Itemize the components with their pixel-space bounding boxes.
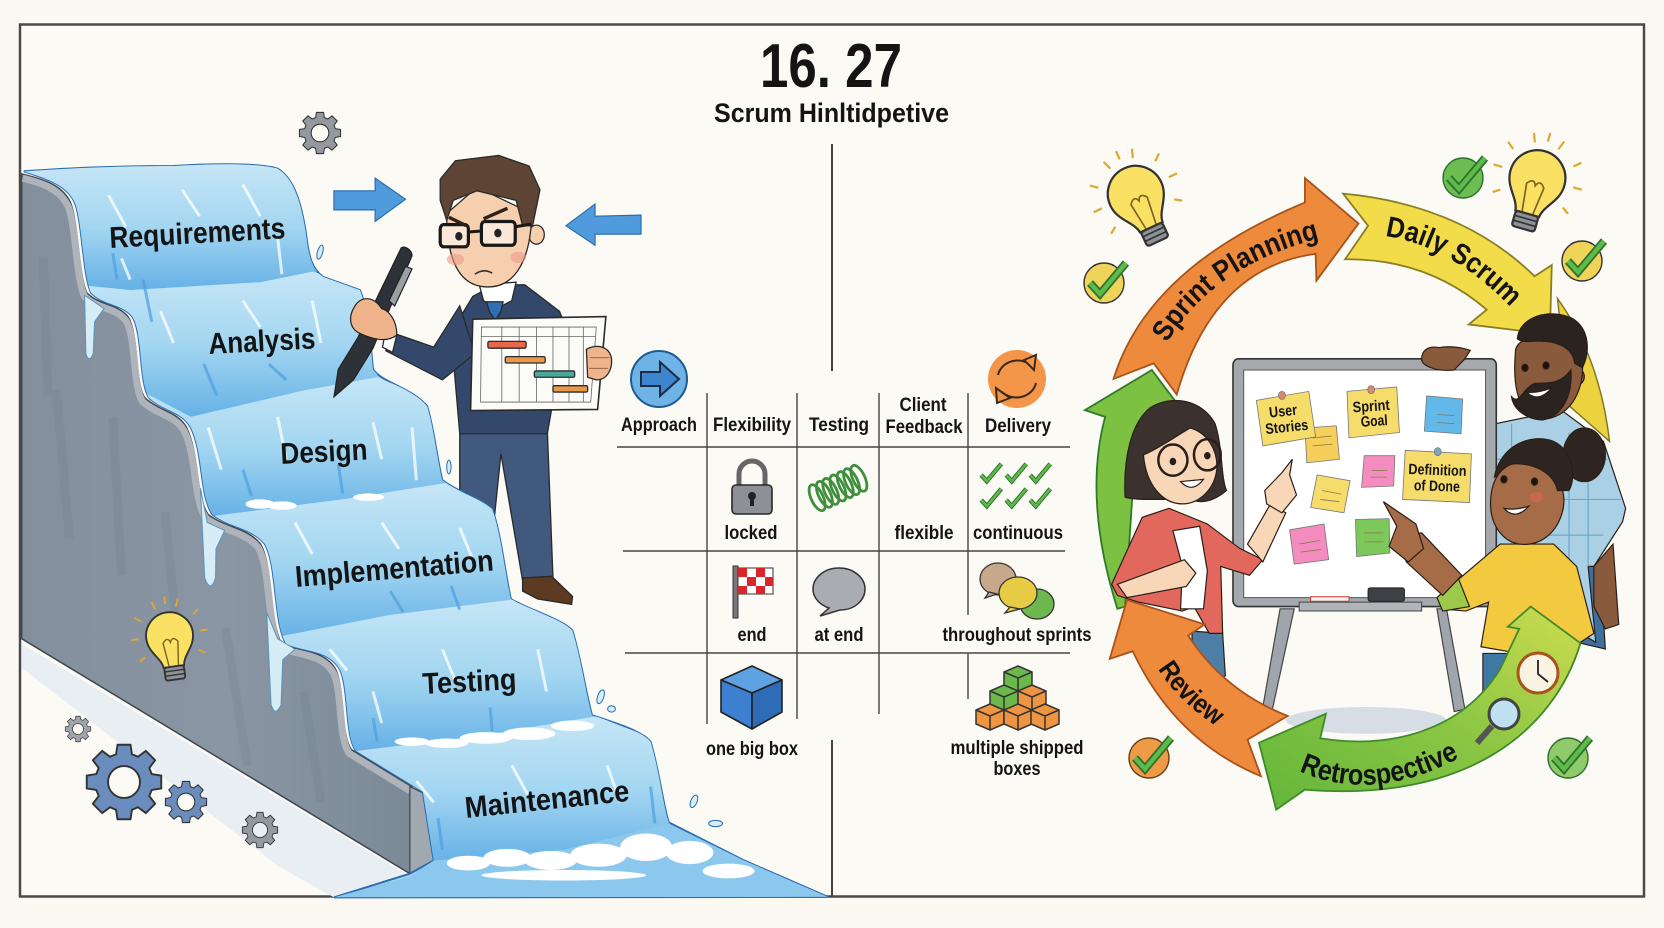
cycle path: Sprint Planning	[1167, 236, 1330, 343]
badge: check yellow right	[1562, 241, 1604, 281]
foam	[245, 493, 755, 881]
note text: Sprint Goal	[1352, 397, 1391, 431]
cell labels: boxes	[994, 758, 1041, 780]
title block	[714, 32, 949, 128]
column headers: Feedback	[886, 416, 963, 438]
cycle text: Daily Scrum: Daily Scrum	[1386, 216, 1519, 306]
subtitle: Scrum Hinltidpetive	[714, 98, 949, 128]
waterfall label: Design: Design	[280, 433, 368, 471]
stair wall	[22, 174, 434, 874]
waterfall label: Requirements: Requirements	[109, 212, 286, 255]
cell labels: end	[738, 624, 766, 646]
icon: gray speech bubble	[813, 568, 865, 616]
center divider	[831, 144, 833, 897]
icon: big blue gear	[87, 745, 161, 819]
cycle text: Sprint Planning: Sprint Planning	[1152, 224, 1318, 340]
column headers: Approach	[621, 414, 697, 436]
icon: clock	[1518, 653, 1558, 693]
title: 16. 27	[760, 32, 902, 101]
icon: medium blue gear	[165, 781, 207, 823]
cycle path: Retrospective	[1299, 746, 1480, 785]
note text: User Stories	[1263, 401, 1309, 438]
cycle text: Review: Review	[1158, 660, 1224, 724]
arrow: retrospective	[1259, 607, 1580, 810]
panel: scrum cycle	[1082, 132, 1626, 812]
icon: spring	[806, 463, 870, 513]
badge: check orange	[1129, 738, 1171, 778]
arrow: sprint planning	[1114, 178, 1359, 395]
waterfall label: Testing: Testing	[422, 663, 517, 701]
cell labels: continuous	[973, 522, 1063, 544]
water steps	[17, 163, 828, 897]
note text: Definition of Done: of Done	[1414, 477, 1460, 496]
icon: approach arrow	[631, 351, 687, 407]
column headers: Flexibility	[713, 414, 791, 436]
badge: check yellow left	[1084, 263, 1126, 303]
cell labels: multiple shipped	[950, 737, 1084, 759]
whiteboard	[1233, 359, 1496, 734]
panel: waterfall	[17, 112, 828, 897]
icon: small gear	[65, 716, 91, 742]
drips	[85, 295, 295, 711]
waterfall label: Maintenance: Maintenance	[463, 775, 631, 825]
splash droplets	[316, 244, 723, 827]
panel: comparison table	[617, 350, 1092, 780]
water streaks	[108, 184, 620, 802]
icon: bulb left	[1074, 132, 1200, 261]
icon: bulb on wall	[126, 591, 214, 685]
hand on board	[1422, 347, 1470, 370]
note text: Definition of Done	[1408, 461, 1467, 496]
cell labels: one big box	[706, 738, 798, 760]
arrow: review	[1110, 600, 1288, 776]
arrow: daily scrum	[1343, 194, 1552, 334]
column headers: Delivery	[985, 415, 1051, 437]
woman presenter	[1112, 401, 1297, 685]
column headers: Testing	[809, 414, 869, 436]
pen and hand	[334, 247, 412, 397]
cell labels: locked	[724, 522, 778, 544]
note text: Sprint Goal: Sprint	[1352, 397, 1390, 416]
waterfall label: Implementation: Implementation	[294, 544, 495, 594]
icon: big blue box	[721, 666, 782, 729]
yellow sliver behind man	[1558, 299, 1610, 441]
cell labels: flexible	[894, 522, 954, 544]
gantt chart	[471, 317, 606, 411]
note text: Definition of Done: Definition	[1408, 461, 1467, 480]
blue arrow left	[566, 204, 641, 245]
column headers: Client	[900, 394, 947, 416]
head	[529, 225, 544, 244]
icon: bulb right	[1479, 120, 1595, 241]
manager body	[383, 155, 612, 604]
note text: Sprint Goal: Goal	[1360, 412, 1388, 431]
note text: User Stories: Stories	[1265, 417, 1309, 438]
wall top lip	[23, 178, 410, 791]
icon: three speech bubbles	[980, 563, 1054, 619]
badge: check green bottom	[1548, 738, 1590, 778]
sticky notes	[1256, 386, 1471, 564]
cycle path: Daily Scrum	[1385, 236, 1515, 312]
icon: gray gear top	[299, 112, 341, 154]
icon: six checkmarks	[981, 464, 1050, 506]
pool	[334, 823, 828, 897]
arrow: green left	[1085, 370, 1179, 609]
cell labels: at end	[814, 624, 864, 646]
man in plaid	[1496, 314, 1626, 649]
icon: delivery cycle	[988, 350, 1046, 408]
wall end cap	[410, 787, 434, 874]
cycle path: Review	[1158, 669, 1230, 735]
water body	[24, 164, 828, 897]
waterfall label: Analysis: Analysis	[208, 322, 316, 361]
icon: checkered flag	[733, 566, 773, 618]
icon: stacked boxes	[976, 666, 1059, 730]
cell labels: throughout sprints	[942, 624, 1092, 646]
icon: magnifier	[1477, 699, 1519, 743]
icon: gray gear bottom	[242, 812, 278, 848]
blue arrow right	[334, 178, 406, 221]
cycle text: Retrospective: Retrospective	[1300, 746, 1457, 790]
ground shadow	[22, 644, 410, 897]
cell labels	[706, 522, 1092, 780]
table grid	[617, 393, 1070, 724]
badge: check green top	[1443, 158, 1485, 198]
girl pointing	[1383, 428, 1605, 696]
column headers	[621, 394, 1051, 438]
note text: User Stories: User	[1268, 402, 1298, 422]
icon: lock	[732, 461, 772, 514]
